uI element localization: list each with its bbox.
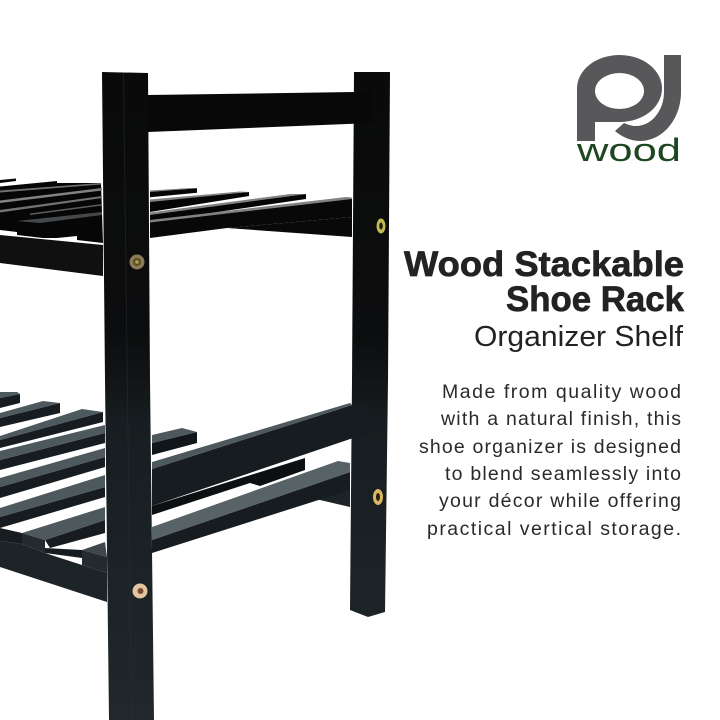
upper shelf left rail <box>0 235 103 276</box>
heading line 2: Shoe Rack <box>506 280 685 319</box>
heading line 1: Wood Stackable <box>404 245 684 284</box>
description text: shoe organizer is designed <box>419 436 681 458</box>
description text: with a natural finish, this <box>440 408 681 430</box>
lower shelf bottom rail <box>152 472 350 553</box>
right back post <box>350 72 390 617</box>
lower shelf under slat <box>152 458 305 515</box>
logo: PJ Wood <box>576 55 681 168</box>
description text <box>419 381 681 540</box>
lower shelf left slat faces <box>0 394 105 558</box>
description text: Made from quality wood <box>442 381 681 403</box>
shoe rack product illustration <box>0 72 390 720</box>
bolt: upper front <box>130 254 144 270</box>
logo letter p <box>577 55 662 141</box>
front post edge highlight <box>123 73 132 720</box>
upper shelf under brace <box>227 217 352 237</box>
bolt: lower front <box>132 584 148 598</box>
upper shelf <box>0 178 352 276</box>
upper shelf right rail <box>150 198 352 238</box>
logo word wood: wood <box>576 132 681 168</box>
heading <box>404 245 685 353</box>
lower shelf left slat ends <box>22 533 45 553</box>
lower shelf <box>0 392 368 602</box>
lower shelf left slat tops <box>0 392 107 557</box>
upper shelf right slats <box>150 188 306 222</box>
lower shelf brace <box>307 488 350 507</box>
top crossbar <box>148 91 372 132</box>
lower shelf left rail <box>0 541 107 602</box>
subheading: Organizer Shelf <box>474 321 684 353</box>
lower shelf front rail <box>152 405 368 506</box>
bolt: upper back <box>376 218 386 234</box>
lower shelf protruding slat <box>152 432 197 455</box>
logo letter j <box>615 55 681 141</box>
bolt: lower back <box>373 489 383 505</box>
description text: your décor while offering <box>439 490 681 512</box>
front post <box>102 72 154 720</box>
description text: practical vertical storage. <box>427 518 681 540</box>
description text: to blend seamlessly into <box>445 463 681 485</box>
upper shelf left slats <box>0 178 103 243</box>
